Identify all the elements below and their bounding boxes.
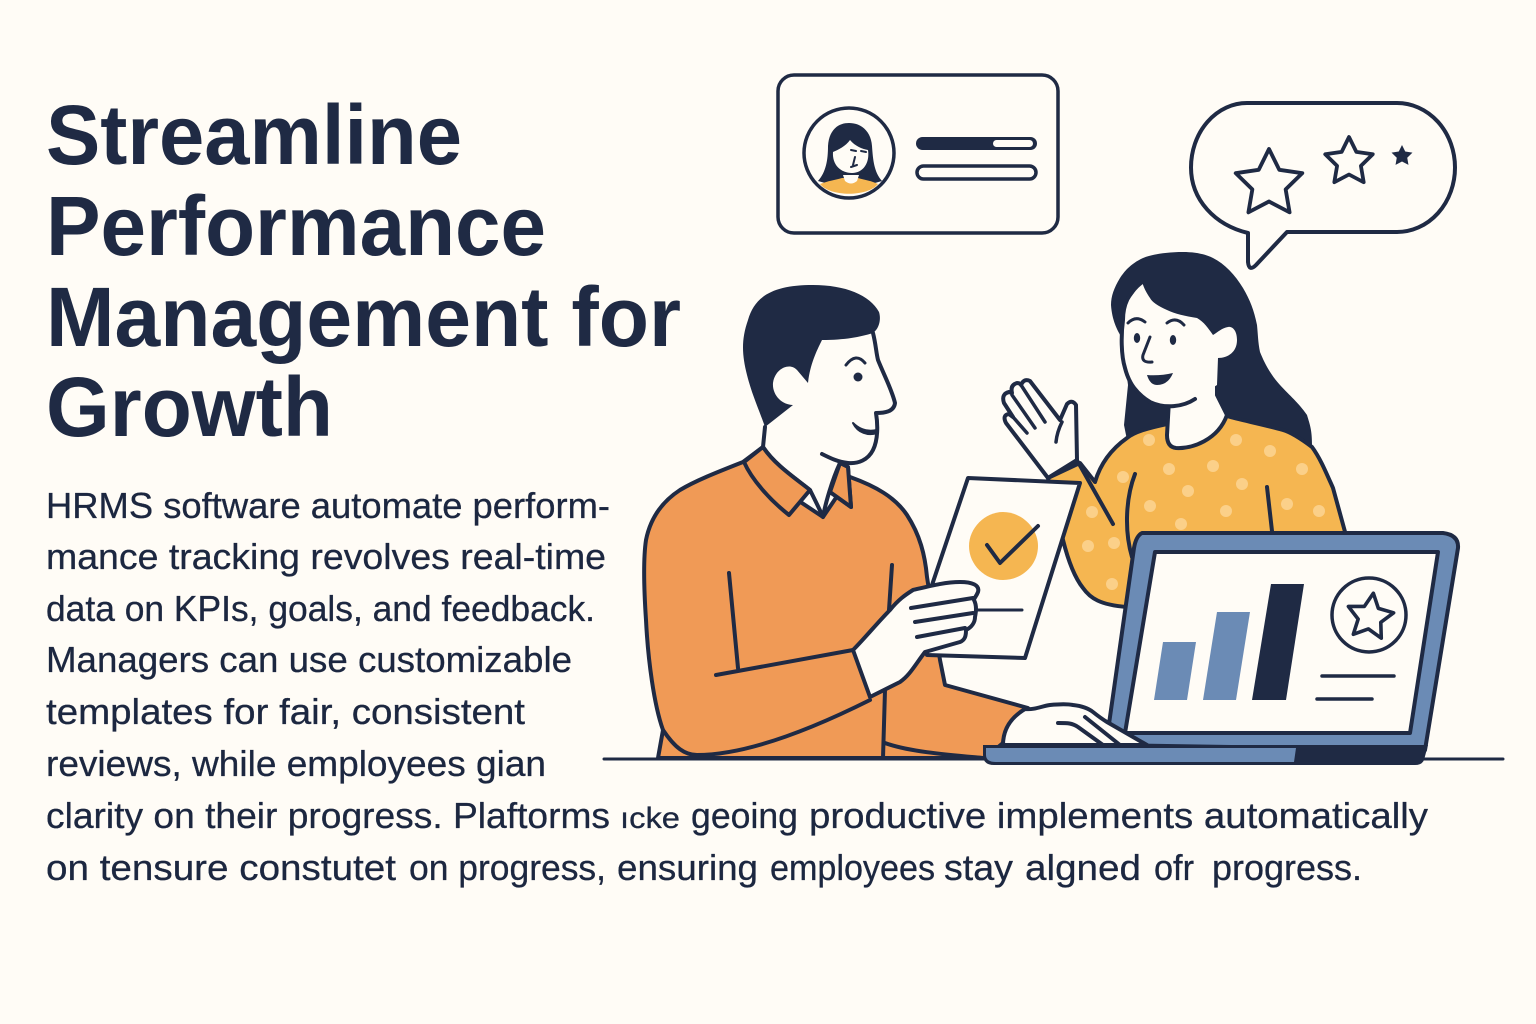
icon: check badge xyxy=(969,512,1038,580)
man sweater xyxy=(644,447,1028,758)
woman face xyxy=(1122,282,1237,407)
body paragraph: data on KPIs, goals, and feedback. xyxy=(46,588,595,629)
title: Management for xyxy=(46,270,681,364)
icon: medium star xyxy=(1325,137,1373,182)
man face xyxy=(765,333,895,463)
woman facial features xyxy=(1128,319,1184,385)
speech bubble with stars xyxy=(1191,103,1455,268)
bar chart xyxy=(1154,584,1304,700)
laptop lid and screen xyxy=(1106,533,1458,750)
profile card xyxy=(778,75,1058,233)
man hand on laptop xyxy=(1003,704,1147,745)
body paragraph: Managers can use customizable xyxy=(46,639,572,680)
body paragraph: ensuring xyxy=(617,847,758,888)
progress bar filled xyxy=(916,137,1037,150)
sweater dots xyxy=(1082,434,1325,590)
laptop lid xyxy=(1106,533,1458,750)
body paragraph: on progress, xyxy=(409,847,606,888)
body paragraph: productive implements automatically xyxy=(809,795,1428,836)
woman raised hand xyxy=(1003,380,1077,478)
body paragraph: clarity on their progress. Plaftorms xyxy=(46,795,610,836)
body paragraph: templates for fair, consistent xyxy=(46,691,525,732)
title: Streamline xyxy=(46,88,462,182)
man sleeve and shirt seams xyxy=(663,565,983,758)
man neck xyxy=(763,400,860,517)
desk line xyxy=(604,758,1503,760)
body paragraph: employees xyxy=(770,847,935,888)
body paragraph: ofr xyxy=(1154,847,1194,888)
body paragraph: geoing xyxy=(691,795,798,836)
man hand holding document xyxy=(853,582,978,697)
laptop base xyxy=(983,745,1428,765)
screen text lines xyxy=(1317,676,1394,699)
man xyxy=(644,285,1080,758)
icon: avatar xyxy=(804,108,894,198)
title: Performance xyxy=(46,179,546,273)
man facial features xyxy=(846,358,877,434)
body paragraph: stay xyxy=(944,847,1013,888)
woman sweater xyxy=(1048,416,1350,620)
body paragraph: HRMS software automate perform- xyxy=(46,485,610,526)
document with check xyxy=(927,478,1080,658)
body paragraph xyxy=(46,485,1428,888)
woman hair xyxy=(1111,252,1312,455)
woman neck xyxy=(1167,350,1227,448)
man collar xyxy=(763,427,851,517)
title xyxy=(46,88,681,454)
woman xyxy=(1003,252,1350,620)
progress bar empty xyxy=(917,166,1036,179)
body paragraph: algned xyxy=(1025,847,1141,888)
body paragraph: ıcke xyxy=(620,802,680,835)
title: Growth xyxy=(46,360,333,454)
body paragraph: mance tracking revolves real-time xyxy=(46,536,606,577)
icon: small star xyxy=(1392,145,1412,165)
icon: star badge xyxy=(1332,578,1406,652)
laptop screen xyxy=(1125,552,1438,733)
body paragraph: on tensure constutet xyxy=(46,847,396,888)
body paragraph: progress. xyxy=(1212,847,1362,888)
man hair xyxy=(743,285,880,427)
body paragraph: reviews, while employees gian xyxy=(46,743,546,784)
icon: large star xyxy=(1236,149,1302,212)
